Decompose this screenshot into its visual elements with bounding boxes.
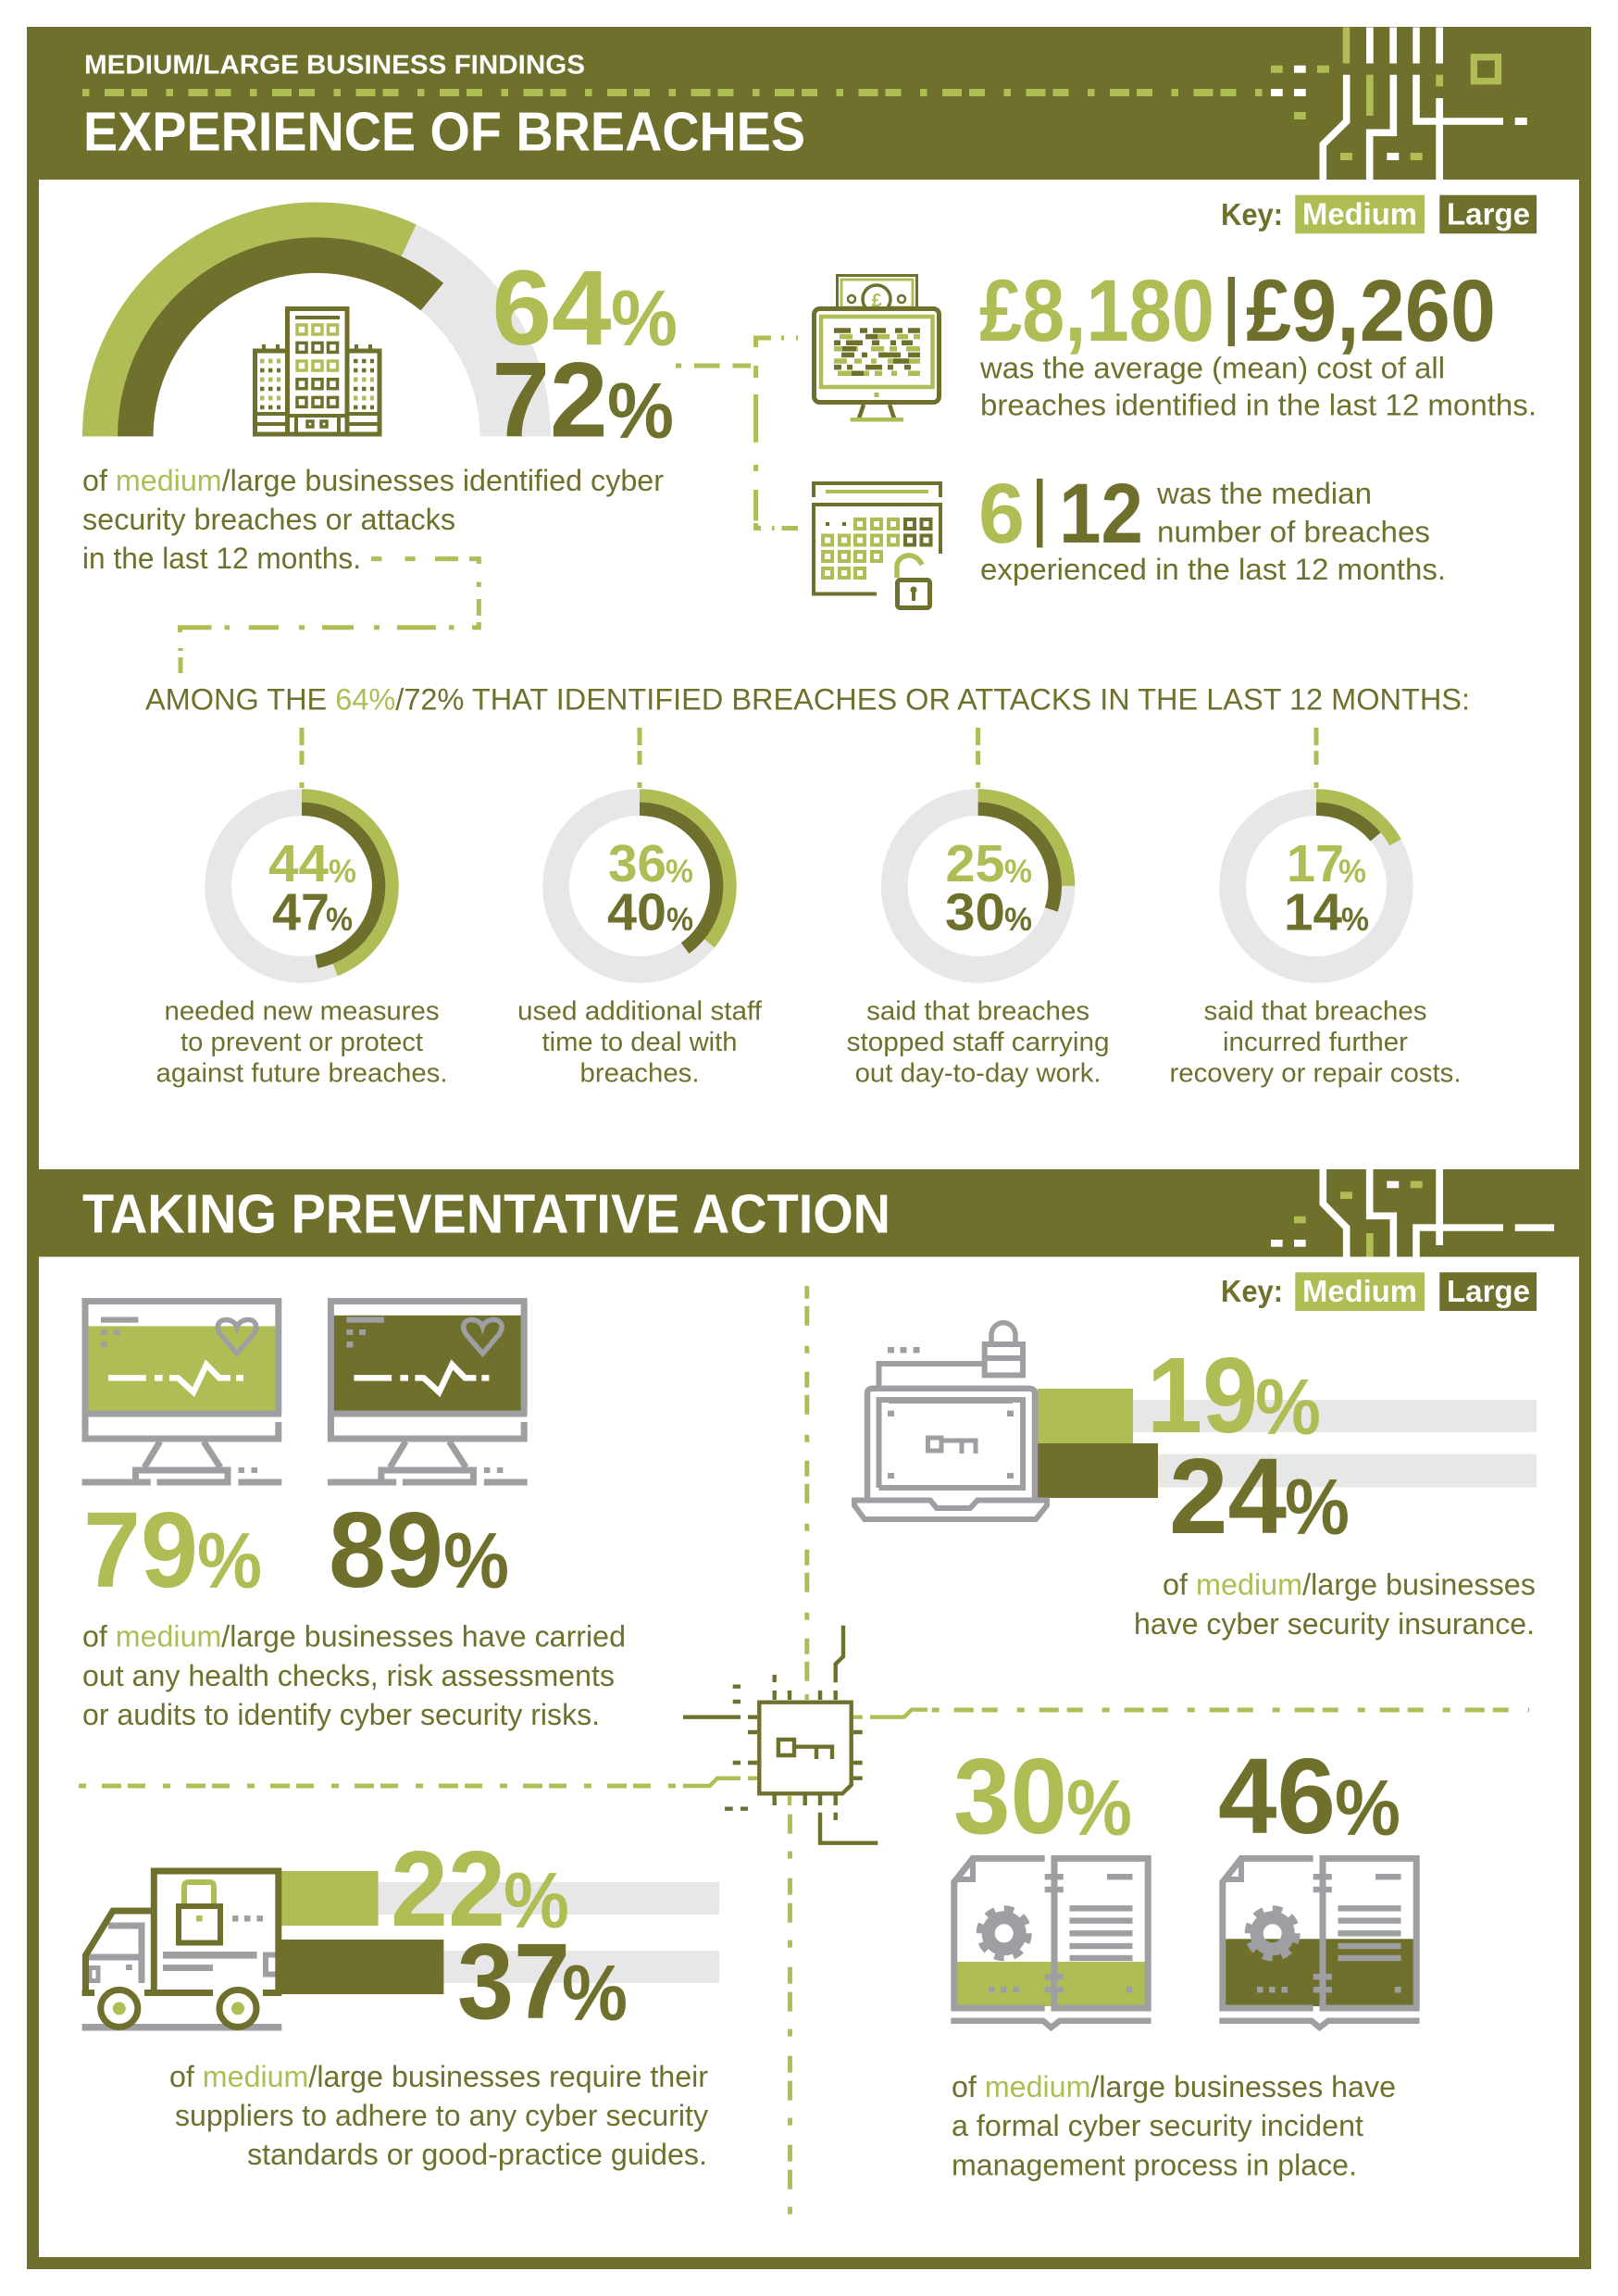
stat: 46%: 46 <box>1218 1736 1336 1856</box>
stat: average cost: £8,180 <box>979 262 1214 360</box>
icon: laptop with lock and key <box>854 1323 1047 1519</box>
caption: to prevent or protect <box>180 1028 423 1057</box>
donut: additional staff time: % <box>666 902 693 938</box>
stat: 37%: % <box>562 1950 628 2038</box>
stat: 46%: % <box>1335 1765 1400 1853</box>
caption: recovery or repair costs. <box>1170 1058 1461 1088</box>
donut: recovery or repair costs <box>1170 728 1461 1088</box>
stat: 24% <box>1169 1436 1350 1556</box>
panel: supplier standards <box>82 1828 719 2171</box>
text: average cost description: was the average (mean) cost of all <box>979 352 1445 385</box>
stat: 89%: % <box>443 1517 509 1605</box>
text: gauge description: security breaches or attacks <box>82 503 455 536</box>
circuit decoration <box>1271 1169 1554 1257</box>
caption: incurred further <box>1223 1028 1408 1057</box>
text: median breaches description: number of breaches <box>1157 516 1430 549</box>
donut: stopped day-to-day work: % <box>1004 902 1032 938</box>
donut: stopped day-to-day work <box>847 728 1110 1088</box>
stat: 19%: % <box>1255 1364 1321 1452</box>
stat: 79%: % <box>197 1517 262 1605</box>
caption: out day-to-day work. <box>855 1058 1101 1088</box>
icon: central chip with key <box>683 1626 927 1843</box>
donut: stopped day-to-day work: 25 <box>946 834 1005 893</box>
donut: stopped day-to-day work: 30 <box>945 883 1005 942</box>
text: incident management description: a formal cyber security incident <box>952 2109 1363 2142</box>
key: medium and large (bottom): Medium <box>1302 1274 1417 1308</box>
donut: recovery or repair costs: % <box>1341 902 1369 938</box>
caption: breaches. <box>579 1058 700 1088</box>
text: supplier standards description <box>169 2060 708 2171</box>
stat: 64% medium <box>492 249 678 368</box>
divider lines: dashed connectors from chip <box>79 1286 1529 2215</box>
stat: 46% <box>1218 1736 1400 1856</box>
text: health checks description: of medium/large businesses have carried <box>82 1620 626 1653</box>
text: health checks description <box>82 1620 626 1731</box>
donut: new measures: % <box>329 854 356 890</box>
stat: 72% large <box>492 341 674 459</box>
panel: incident management <box>951 1736 1420 2181</box>
key: medium and large (top) <box>1221 195 1537 233</box>
stat: 30% <box>953 1736 1132 1856</box>
stat: 64% medium: % <box>611 275 678 363</box>
text: incident management description <box>952 2070 1396 2181</box>
stat: 89%: 89 <box>329 1490 443 1610</box>
text: average cost description <box>979 352 1537 422</box>
section title: EXPERIENCE OF BREACHES <box>83 102 805 163</box>
stat: 79% <box>83 1490 262 1610</box>
stat: average cost: £9,260 <box>1246 262 1496 360</box>
text: insurance description: have cyber security insurance. <box>1134 1607 1535 1641</box>
text: incident management description: management process in place. <box>952 2148 1357 2181</box>
donut: additional staff time <box>517 728 763 1088</box>
circuit decoration <box>1271 28 1527 180</box>
text: median breaches description <box>980 477 1446 586</box>
caption: used additional staff <box>517 997 763 1027</box>
caption <box>517 997 763 1088</box>
header: taking preventative action <box>27 1169 1591 1257</box>
caption <box>156 997 447 1088</box>
stat: 24%: % <box>1285 1464 1350 1552</box>
key: medium and large (top): Medium <box>1302 196 1417 231</box>
stat: 19% <box>1147 1335 1321 1455</box>
icon: calendar with padlock <box>814 483 940 607</box>
stat: median breaches: 12 <box>1059 467 1143 561</box>
stat: 30%: % <box>1066 1765 1132 1853</box>
stat: average cost <box>979 262 1537 422</box>
key: medium and large (bottom) <box>1221 1272 1537 1311</box>
donut: additional staff time: 40 <box>607 883 666 942</box>
text: gauge description: of medium/large businesses identified cyber <box>82 464 664 497</box>
text: health checks description: or audits to identify cyber security risks. <box>82 1698 600 1731</box>
donut: recovery or repair costs: 14 <box>1284 883 1342 942</box>
text: average cost description: breaches identified in the last 12 months. <box>980 389 1537 422</box>
donut: stopped day-to-day work: % <box>1004 854 1032 890</box>
connector: gauge to findings <box>180 338 798 673</box>
icon: monitor large <box>328 1302 528 1482</box>
stat: 30%: 30 <box>953 1736 1067 1856</box>
icon: office buildings <box>255 309 380 434</box>
icon: delivery truck with padlock <box>82 1871 281 2031</box>
stat: 22%: % <box>504 1857 569 1945</box>
stat: 79%: 79 <box>83 1490 198 1610</box>
icon: manual medium <box>951 1858 1151 2028</box>
stat: median breaches <box>978 467 1446 586</box>
stat: 19%: 19 <box>1147 1335 1258 1455</box>
caption: needed new measures <box>165 997 439 1027</box>
donut: recovery or repair costs: % <box>1338 854 1366 890</box>
stat: 72% large: 72 <box>492 341 607 459</box>
panel: health checks <box>82 1302 626 1731</box>
text: incident management description: of medium/large businesses have <box>952 2070 1396 2103</box>
key: medium and large (top): Key: <box>1221 197 1283 231</box>
caption <box>1170 997 1461 1088</box>
stat: 64% medium: 64 <box>492 249 612 368</box>
text: insurance description <box>1134 1568 1536 1641</box>
text: median breaches description: was the median <box>1156 477 1372 510</box>
donut: additional staff time: 36 <box>608 834 666 893</box>
stat: 24%: 24 <box>1169 1436 1287 1556</box>
key: medium and large (bottom): Key: <box>1221 1274 1283 1308</box>
caption: stopped staff carrying <box>847 1028 1110 1057</box>
subtitle: MEDIUM/LARGE BUSINESS FINDINGS <box>84 50 585 80</box>
donut: new measures: 47 <box>272 883 330 942</box>
caption: time to deal with <box>542 1028 737 1057</box>
icon: computer with banknote <box>815 276 939 422</box>
caption: against future breaches. <box>156 1058 447 1088</box>
key: medium and large (top): Large <box>1447 196 1530 231</box>
stat: 37%: 37 <box>457 1921 570 2041</box>
text: supplier standards description: standards or good-practice guides. <box>247 2138 707 2171</box>
donut: new measures <box>156 728 447 1088</box>
icon: computer with banknote: £ <box>871 291 882 311</box>
text: median breaches description: experienced in the last 12 months. <box>980 553 1446 586</box>
text: gauge description: in the last 12 months. <box>82 542 361 575</box>
text: supplier standards description: suppliers to adhere to any cyber security <box>175 2099 708 2132</box>
donut: additional staff time: % <box>666 854 693 890</box>
icon: monitor medium <box>82 1302 281 1482</box>
panel: cyber security insurance <box>854 1323 1537 1641</box>
caption: said that breaches <box>866 997 1089 1027</box>
stat: 72% large: % <box>607 368 674 455</box>
stat: 89% <box>329 1490 509 1610</box>
text: health checks description: out any health checks, risk assessments <box>82 1659 615 1692</box>
subheading: among those that identified breaches: AMONG THE 64%/72% THAT IDENTIFIED BREACHES OR ATTACKS IN THE LAST 12 MONTHS: <box>145 683 1470 717</box>
stat: 22% <box>391 1828 569 1949</box>
stat: 22%: 22 <box>391 1828 505 1949</box>
donut: new measures: 44 <box>268 834 329 893</box>
key: medium and large (bottom): Large <box>1447 1274 1530 1308</box>
text: insurance description: of medium/large businesses <box>1163 1568 1536 1602</box>
header: experience of breaches <box>27 28 1591 180</box>
donut: recovery or repair costs: 17 <box>1287 834 1344 893</box>
text: gauge description <box>82 464 664 575</box>
icon: manual large <box>1219 1858 1420 2028</box>
caption: said that breaches <box>1203 997 1427 1027</box>
stat: median breaches: 6 <box>978 467 1025 561</box>
gauge: breaches identified <box>100 219 678 459</box>
donut: new measures: % <box>326 902 353 938</box>
text: supplier standards description: of medium/large businesses require their <box>169 2060 708 2093</box>
caption <box>847 997 1110 1088</box>
section title: TAKING PREVENTATIVE ACTION <box>82 1183 890 1244</box>
